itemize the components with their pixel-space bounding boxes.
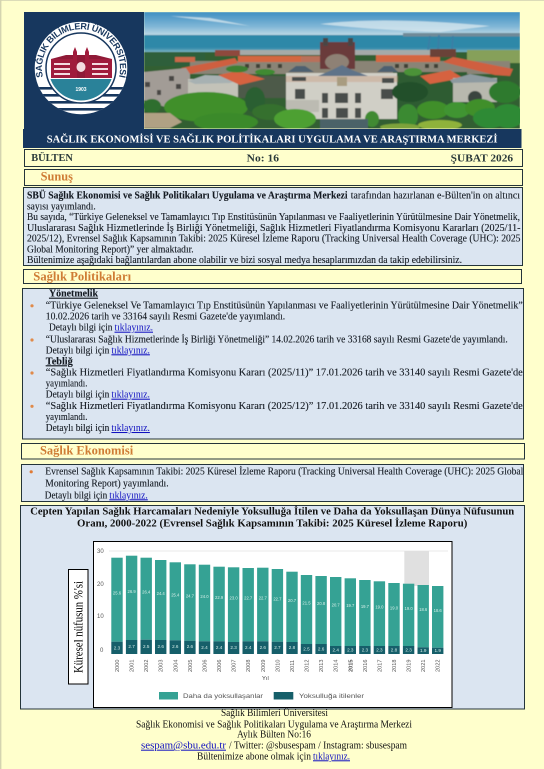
heading: Sunuş xyxy=(24,170,522,186)
item: Uluslararası Sağlık: tıklayınız. xyxy=(111,345,150,356)
y axis ticks: 30 xyxy=(97,549,104,555)
item: Uluslararası Sağlık: “Uluslararası Sağlık Hizmetlerinde İş Birliği Yönetmeliği” 14.02.2026 tarih ve 33168 sayılı Resmi Gazete'de yayımlandı. xyxy=(46,333,508,345)
footer: Bültenimize abone olmak için xyxy=(197,751,311,762)
dark value labels: 2.7 xyxy=(128,644,135,649)
year labels: 2013 xyxy=(319,660,325,672)
year labels: 2018 xyxy=(392,660,398,672)
item: Uluslararası Sağlık xyxy=(30,333,508,356)
year labels: 2010 xyxy=(275,660,281,672)
year labels: 2001 xyxy=(130,660,136,672)
panel: Sunuş text: sayısı yayımlandı. xyxy=(27,202,96,212)
front white wings xyxy=(188,79,238,97)
year labels: 2019 xyxy=(407,660,413,672)
item: Komisyon Kararı 2025/12: yayımlandı. xyxy=(46,412,87,423)
legend: Daha da yoksullaşanlar xyxy=(183,693,264,700)
main facade xyxy=(286,73,397,119)
year labels: 2017 xyxy=(377,660,383,672)
teal value labels: 22.7 xyxy=(244,596,253,601)
back tower xyxy=(320,42,355,69)
subheading: Tebliğ: Tebliğ xyxy=(46,356,74,367)
dark value labels: 2.3 xyxy=(347,648,354,652)
teal value labels: 19.0 xyxy=(375,605,384,610)
header logo panel xyxy=(24,12,144,129)
issue info bar: BÜLTEN xyxy=(31,151,73,164)
heading: Sağlık Politikaları: Sağlık Politikaları xyxy=(33,270,132,284)
panel: Sunuş text: 2025/12), Evrensel Sağlık Kapsamının Takibi: 2025 Küresel İzleme Raporu (Tracking Universal Health Coverage (UHC): 2025 xyxy=(27,233,520,245)
y axis ticks: 10 xyxy=(97,614,104,620)
dark value labels: 2.5 xyxy=(303,646,310,652)
panel: Sunuş text: Bültenimize aşağıdaki bağlantılardan abone olabilir ve bizi sosyal medya hesaplarımızdan da takip edebilirsiniz. xyxy=(27,255,462,266)
item: Komisyon Kararı 2025/11: tıklayınız. xyxy=(111,390,150,401)
dark value labels: 2.7 xyxy=(274,645,281,650)
dark value labels: 2.3 xyxy=(230,645,237,650)
item: Uluslararası Sağlık: Detaylı bilgi için xyxy=(46,345,109,356)
item: Komisyon Kararı 2025/12: tıklayınız. xyxy=(111,423,150,434)
year labels: 2011 xyxy=(290,660,296,672)
dark value labels xyxy=(114,644,441,653)
bar chart xyxy=(97,549,448,700)
teal value labels: 24.0 xyxy=(200,594,209,599)
teal value labels: 20.8 xyxy=(317,601,326,606)
item: Türkiye Geleneksel: “Türkiye Geleneksel Ve Tamamlayıcı Tıp Enstitüsünün Yapılanması ve Faaliyetlerinin Yürütülmesine Dair Yönetmelik” xyxy=(46,300,523,311)
teal value labels: 19.7 xyxy=(346,603,355,608)
dark value labels: 2.6 xyxy=(187,644,194,649)
teal value labels: 19.0 xyxy=(405,606,413,611)
dark value labels: 2.3 xyxy=(405,648,412,652)
trees xyxy=(143,66,524,131)
issue info bar xyxy=(24,150,522,166)
item: Türkiye Geleneksel xyxy=(30,300,523,334)
year labels: 2002 xyxy=(144,660,150,672)
y axis ticks: 20 xyxy=(97,582,104,588)
year labels: 2021 xyxy=(421,660,427,672)
teal value labels: 26.4 xyxy=(142,590,151,595)
teal value labels: 25.6 xyxy=(113,591,122,596)
year labels: 2006 xyxy=(202,660,208,672)
y axis ticks xyxy=(97,549,104,654)
year labels: 2004 xyxy=(173,660,179,672)
dark value labels: 2.8 xyxy=(289,645,296,650)
panel: chart section xyxy=(20,506,524,709)
left gray wing xyxy=(144,68,190,108)
heading: Sağlık Politikaları xyxy=(24,270,522,284)
dark value labels: 2.3 xyxy=(114,646,121,650)
dark value labels: 2.5 xyxy=(143,644,150,649)
dark value labels: 2.6 xyxy=(318,646,325,652)
year labels: 2015 xyxy=(348,660,354,672)
y axis label box: Küresel nüfusun %'si xyxy=(72,581,86,673)
footer xyxy=(136,707,412,762)
panel: Sunuş text: Uluslararası Sağlık Hizmetlerinde İş Birliği Yönetmeliği, Sağlık Hizmetleri Fiyatlandırma Komisyonu Kararları (2025/11- xyxy=(27,222,521,234)
dark value labels: 2.4 xyxy=(245,645,252,650)
year labels: 2016 xyxy=(363,660,369,672)
panel: Sunuş text: Global Monitoring Report)” yer almaktadır. xyxy=(27,244,194,255)
year labels: 2022 xyxy=(436,660,442,672)
issue info bar: ŞUBAT 2026 xyxy=(451,154,513,164)
title banner: SAĞLIK EKONOMİSİ VE SAĞLIK POLİTİKALARI UYGULAMA VE ARAŞTIRMA MERKEZİ xyxy=(47,132,498,145)
item: Komisyon Kararı 2025/11: yayımlandı. xyxy=(46,379,87,390)
panel: Sunuş text xyxy=(24,188,522,266)
dark value labels: 2.3 xyxy=(376,648,383,652)
y axis label box xyxy=(68,570,88,684)
heading: Sağlık Ekonomisi xyxy=(22,443,524,459)
dark value labels: 2.4 xyxy=(201,645,208,650)
dark value labels: 2.6 xyxy=(172,644,179,649)
teal value labels: 21.5 xyxy=(302,600,311,606)
panel: Sağlık Ekonomisi list xyxy=(22,464,524,502)
dark value labels: 2.6 xyxy=(158,644,164,649)
panel: Sağlık Ekonomisi list: Detaylı bilgi için xyxy=(45,490,107,501)
dark value labels: 2.8 xyxy=(391,648,398,652)
chart title: Cepten Yapılan Sağlık Harcamaları Nedeniyle Yoksulluğa İtilen ve Daha da Yoksullaşan Dünya Nüfusunun xyxy=(30,506,514,518)
footer: / Twitter: @sbusespam / Instagram: sbusespam xyxy=(229,741,407,752)
year labels: 2008 xyxy=(246,660,252,672)
teal value labels: 24.7 xyxy=(186,594,195,598)
chart title: Oranı, 2000-2022 (Evrensel Sağlık Kapsamının Takibi: 2025 Küresel İzleme Raporu) xyxy=(77,518,468,530)
year labels: 2003 xyxy=(159,660,165,672)
heading: Sağlık Ekonomisi: Sağlık Ekonomisi xyxy=(40,443,134,457)
teal value labels: 18.6 xyxy=(419,607,428,612)
teal value labels: 18.6 xyxy=(434,608,442,613)
item: Komisyon Kararı 2025/11: Detaylı bilgi için xyxy=(46,390,109,401)
subheading: Yönetmelik: Yönetmelik xyxy=(49,289,98,300)
teal value labels: 20.7 xyxy=(332,602,340,608)
item: Komisyon Kararı 2025/11: “Sağlık Hizmetleri Fiyatlandırma Komisyonu Kararı (2025/11)” 17.01.2026 tarih ve 33140 sayılı Resmi Gazete'de xyxy=(46,368,523,379)
dark value labels: 2.6 xyxy=(260,645,266,650)
dark value labels: 2.3 xyxy=(362,648,369,652)
teal value labels: 25.4 xyxy=(171,592,180,597)
year labels xyxy=(115,660,442,672)
header campus photo xyxy=(143,12,524,131)
dark value labels: 2.4 xyxy=(216,645,223,650)
panel: Sağlık Ekonomisi list: Monitoring Report) yayımlandı. xyxy=(45,479,169,490)
x axis title: Yıl xyxy=(262,676,269,682)
teal value labels: 19.7 xyxy=(361,604,370,609)
teal value labels xyxy=(113,589,442,613)
dark value labels: 1.9 xyxy=(435,648,441,653)
teal value labels: 23.0 xyxy=(230,596,238,601)
panel: Sağlık Ekonomisi list: tıklayınız. xyxy=(109,490,148,501)
legend: Yoksulluğa itilenler xyxy=(299,693,365,700)
item: Komisyon Kararı 2025/12: “Sağlık Hizmetleri Fiyatlandırma Komisyonu Kararı (2025/12)” 17.01.2026 tarih ve 33140 sayılı Resmi Gazete'de xyxy=(46,401,523,412)
teal value labels: 22.7 xyxy=(259,596,268,600)
teal value labels: 22.9 xyxy=(215,595,224,600)
item: Komisyon Kararı 2025/11 xyxy=(30,368,523,401)
footer: sespam@sbu.edu.tr xyxy=(141,741,227,752)
chart frame xyxy=(94,542,452,708)
teal value labels: 19.0 xyxy=(390,606,399,610)
teal bars xyxy=(111,556,443,648)
y axis ticks: 0 xyxy=(100,648,104,654)
year labels: 2014 xyxy=(334,660,340,672)
header logo panel: 1903 xyxy=(75,87,87,93)
legend xyxy=(159,692,365,700)
panel: Sunuş text: tarafından hazırlanan e-Bülten'in on altıncı xyxy=(351,190,520,201)
logo text: SAĞLIK BİLİMLERİ ÜNİVERSİTESİ xyxy=(35,22,126,78)
heading: Sunuş: Sunuş xyxy=(41,170,73,184)
item: Komisyon Kararı 2025/12: Detaylı bilgi için xyxy=(46,423,109,434)
year labels: 2006 xyxy=(217,660,223,672)
year labels: 2009 xyxy=(261,660,267,672)
chart title xyxy=(30,506,514,530)
title banner xyxy=(23,129,522,148)
panel: Sağlık Politikaları list xyxy=(22,288,524,439)
issue info bar: No: 16 xyxy=(247,154,279,164)
year labels: 2012 xyxy=(304,660,310,672)
year labels: 2005 xyxy=(188,660,194,672)
teal value labels: 26.9 xyxy=(128,589,136,594)
teal value labels: 22.7 xyxy=(273,596,282,601)
dark bars xyxy=(111,640,443,654)
year labels: 2007 xyxy=(232,660,238,672)
teal value labels: 24.4 xyxy=(157,591,165,596)
item: Komisyon Kararı 2025/12 xyxy=(30,401,523,434)
year labels: 2000 xyxy=(115,660,121,672)
dark value labels: 1.9 xyxy=(420,648,427,653)
footer: Sağlık Ekonomisi ve Sağlık Politikaları Uygulama ve Araştırma Merkezi xyxy=(136,720,412,731)
footer: Sağlık Bilimleri Üniversitesi xyxy=(221,707,328,719)
footer: tıklayınız. xyxy=(313,751,350,762)
item: Türkiye Geleneksel: tıklayınız. xyxy=(114,323,153,334)
footer: Aylık Bülten No:16 xyxy=(237,730,311,741)
teal value labels: 20.7 xyxy=(288,598,297,603)
panel: Sunuş text: SBÜ Sağlık Ekonomisi ve Sağlık Politikaları Uygulama ve Araştırma Merkezi xyxy=(27,188,348,201)
item: Türkiye Geleneksel: 10.02.2026 tarih ve 33164 sayılı Resmi Gazete'de yayımlandı. xyxy=(46,311,285,322)
item: Türkiye Geleneksel: Detaylı bilgi için xyxy=(49,323,112,334)
dark value labels: 2.4 xyxy=(333,648,339,652)
